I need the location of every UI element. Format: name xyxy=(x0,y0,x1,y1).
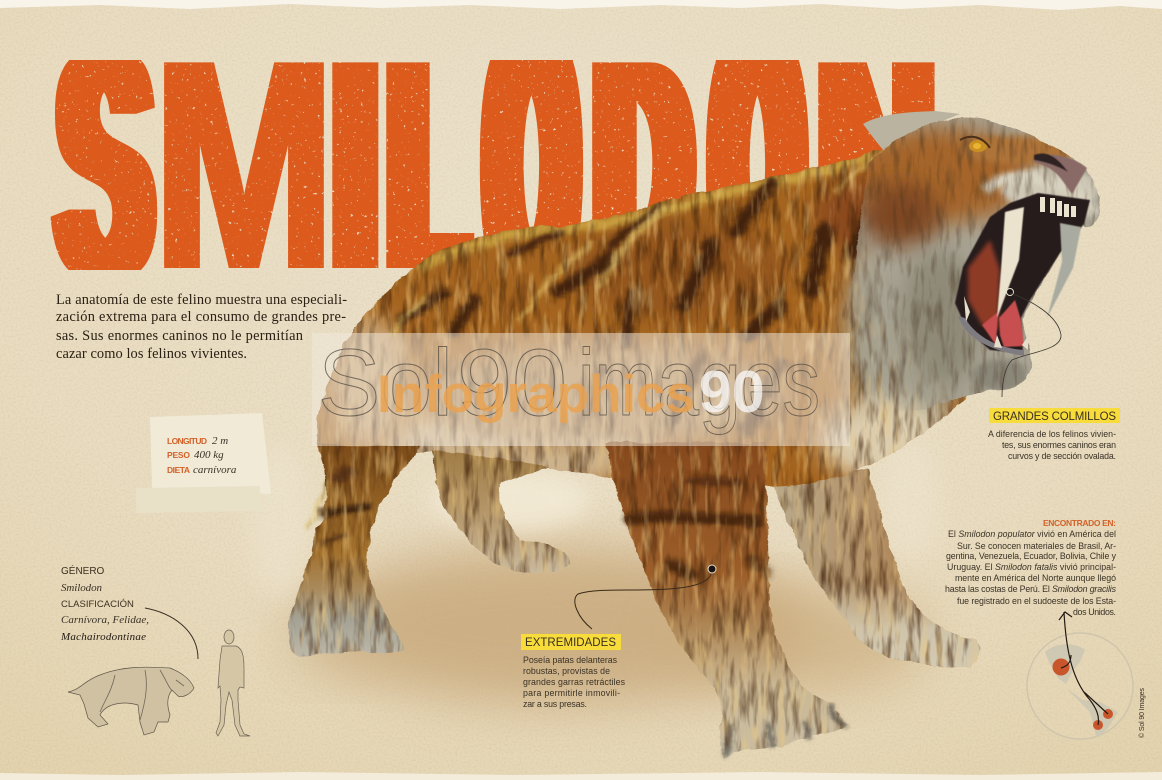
callout: encontrado en xyxy=(945,518,1117,617)
intro text xyxy=(56,292,347,362)
description: grandes garras retráctiles xyxy=(523,677,626,687)
callout: extremidades xyxy=(521,565,716,709)
leader line xyxy=(575,574,711,629)
callout: encontrado en: dos Unidos. xyxy=(1073,607,1116,617)
callout: encontrado en: mente en América del Norte aunque llegó xyxy=(955,573,1116,583)
note card: DIETA xyxy=(167,465,190,475)
image credit: © Sol 90 Images xyxy=(1138,688,1146,738)
mouth xyxy=(955,193,1090,353)
map globe xyxy=(1027,612,1133,739)
watermark band xyxy=(312,330,850,446)
ear xyxy=(863,111,960,155)
watermark: Sol90images: Sol xyxy=(318,330,453,436)
taxonomy notes: Machairodontinae xyxy=(60,631,146,643)
intro text: sas. Sus enormes caninos no le permitían xyxy=(56,328,303,344)
near front leg xyxy=(606,442,848,758)
title: N xyxy=(818,0,934,330)
range dots xyxy=(1052,658,1070,676)
connector curve: taxonomy xyxy=(145,608,198,659)
description: curvos y de sección ovalada. xyxy=(1008,451,1116,461)
far hind leg xyxy=(432,448,570,573)
intro text: zación extrema para el consumo de grandes pre- xyxy=(56,309,346,325)
description xyxy=(523,655,626,709)
note card: PESO xyxy=(167,450,190,460)
note card xyxy=(136,413,271,513)
title: M xyxy=(154,0,334,330)
taxonomy notes: CLASIFICACIÓN xyxy=(61,599,134,610)
note card: 2 m xyxy=(212,435,228,447)
torso xyxy=(316,150,967,487)
description: A diferencia de los felinos vivien- xyxy=(988,429,1116,439)
callout: encontrado en: ENCONTRADO EN: xyxy=(1043,518,1116,528)
description: para permitirle inmovili- xyxy=(523,688,620,698)
eye xyxy=(960,137,990,152)
arrow xyxy=(1059,612,1108,725)
watermark: 90: 90 xyxy=(699,359,765,425)
callout: encontrado en: Sur. Se conocen materiales de Brasil, Ar- xyxy=(957,541,1116,551)
note card: LONGITUD xyxy=(167,436,207,446)
callout: encontrado en: El Smilodon populator vivió en América del xyxy=(948,529,1116,539)
canine right xyxy=(1047,223,1081,318)
intro text: cazar como los felinos vivientes. xyxy=(56,346,247,362)
callout: encontrado en: fue registrado en el sudoeste de los Esta- xyxy=(957,596,1116,606)
callout: encontrado en: gentina, Venezuela, Ecuador, Bolivia, Chile y xyxy=(946,551,1117,561)
label: EXTREMIDADES xyxy=(525,637,616,649)
description: robustas, provistas de xyxy=(523,666,610,676)
label xyxy=(521,634,621,650)
title: D xyxy=(597,0,689,331)
intro text: La anatomía de este felino muestra una especiali- xyxy=(56,292,347,308)
watermark: Infographics: Infographics xyxy=(377,365,695,424)
tongue and gums xyxy=(968,240,1000,330)
ground shadow xyxy=(250,440,940,705)
marker dot xyxy=(1006,288,1014,296)
description xyxy=(988,429,1116,461)
near hind leg xyxy=(288,445,420,657)
illustration: smilodon xyxy=(288,100,1120,758)
taxonomy notes xyxy=(60,564,149,643)
canine left xyxy=(997,207,1024,318)
marker dot xyxy=(708,565,716,573)
taxonomy notes: Smilodon xyxy=(61,582,102,594)
leader line xyxy=(1002,293,1061,397)
description: tes, sus enormes caninos eran xyxy=(1002,440,1116,450)
description: Poseía patas delanteras xyxy=(523,655,618,665)
nose xyxy=(1034,154,1087,194)
taxonomy notes: Carnívora, Felidae, xyxy=(61,614,149,626)
lower teeth xyxy=(994,335,1028,350)
watermark: Sol90images: 90 xyxy=(457,330,567,436)
title xyxy=(50,60,935,270)
note card: carnívora xyxy=(193,464,237,476)
watermark: Sol90images xyxy=(318,330,820,436)
scale sketch: human xyxy=(216,630,250,736)
watermark: Sol90images: images xyxy=(578,330,820,436)
scale sketch: smilodon xyxy=(68,667,194,735)
upper teeth xyxy=(1040,197,1076,217)
callout: grandes colmillos xyxy=(988,288,1120,461)
head xyxy=(840,100,1120,410)
lower lip xyxy=(958,316,1024,356)
callout: encontrado en: Uruguay. El Smilodon fatalis vivió principal- xyxy=(947,562,1116,572)
title: L xyxy=(391,0,465,330)
description: zar a sus presas. xyxy=(523,699,587,709)
far front leg xyxy=(770,470,980,668)
taxonomy notes: GÉNERO xyxy=(61,564,105,577)
note card: 400 kg xyxy=(194,449,224,461)
label: GRANDES COLMILLOS xyxy=(993,411,1116,423)
title: I xyxy=(336,1,375,331)
callout: encontrado en: hasta las costas de Perú. El Smilodon gracilis xyxy=(945,584,1117,594)
